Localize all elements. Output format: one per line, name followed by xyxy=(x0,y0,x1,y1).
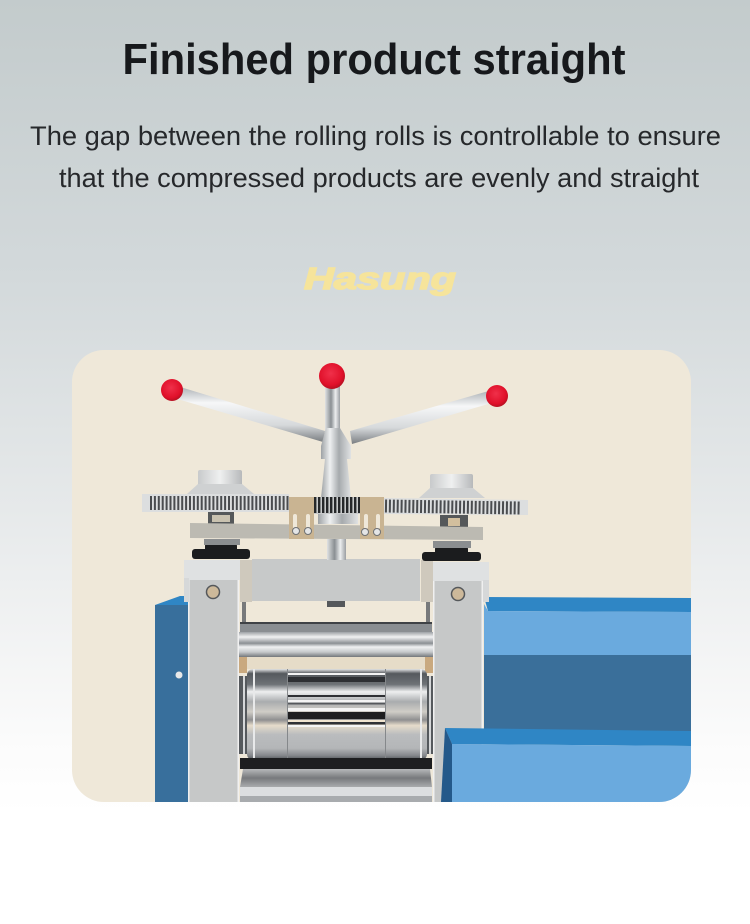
adjustment plate xyxy=(190,523,483,540)
main roller xyxy=(239,669,434,760)
red knob: left xyxy=(161,379,183,401)
panel: product photo xyxy=(72,350,691,802)
description text xyxy=(30,121,721,193)
blue housing: front box xyxy=(441,728,691,802)
blue housing: right xyxy=(484,597,691,735)
bracket: left xyxy=(289,497,314,539)
lower plate xyxy=(240,758,432,802)
bracket: right xyxy=(360,497,384,539)
frame: left column xyxy=(188,580,239,802)
frame: top crossbar xyxy=(184,559,489,607)
blue housing: left xyxy=(155,596,190,802)
upper guide rod xyxy=(239,601,433,673)
red knob: top xyxy=(319,363,345,389)
frame: right column xyxy=(433,580,483,802)
description text: The gap between the rolling rolls is controllable to ensure xyxy=(30,121,721,151)
lower gear spindles xyxy=(208,511,468,527)
handle hub xyxy=(321,428,351,498)
title: Finished product straight xyxy=(122,35,626,84)
gear: left xyxy=(142,494,289,512)
gear: center xyxy=(314,497,360,514)
panel background xyxy=(72,350,691,802)
handle: three arms xyxy=(174,385,495,444)
gear hub: right xyxy=(419,474,485,498)
gear: right xyxy=(384,498,528,515)
brand logo: Hasung: Hasung xyxy=(304,261,456,296)
red knob: right xyxy=(486,385,508,407)
black adjusting nuts xyxy=(192,539,481,561)
description text: that the compressed products are evenly and straight xyxy=(59,163,700,193)
gear hub: left xyxy=(187,470,254,494)
central shaft xyxy=(327,539,346,560)
